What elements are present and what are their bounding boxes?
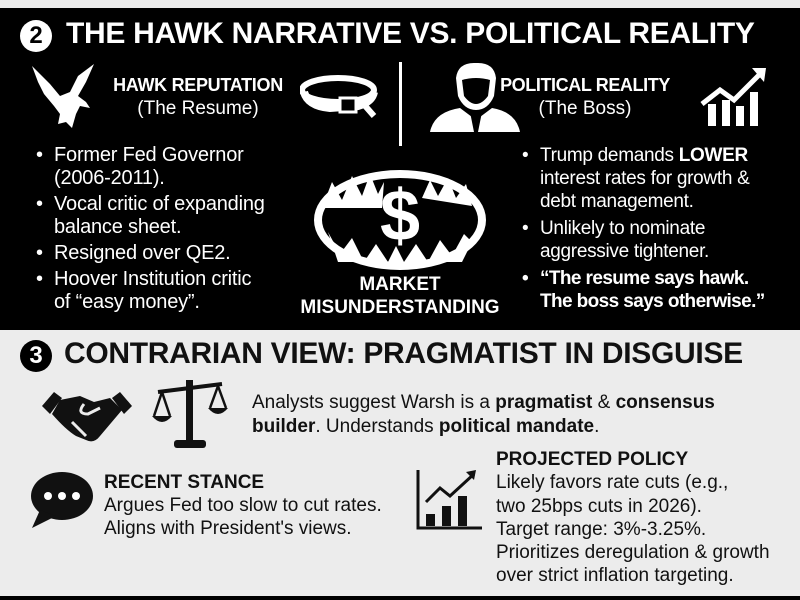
left bullets <box>36 144 265 313</box>
right bullets: interest rates for growth & <box>540 168 749 189</box>
heading: political reality: (The Boss) <box>539 98 631 119</box>
label: market misunderstanding: MISUNDERSTANDING <box>300 297 500 318</box>
block: projected policy: Target range: 3%-3.25%. <box>496 519 706 540</box>
right bullets: aggressive tightener. <box>540 241 709 262</box>
heading: hawk reputation: (The Resume) <box>137 98 259 119</box>
block: projected policy: PROJECTED POLICY <box>496 449 688 470</box>
section badge 2 <box>20 20 52 52</box>
left bullets: Hoover Institution critic <box>54 268 251 290</box>
icon: president silhouette <box>430 63 520 132</box>
icon: eagle <box>32 64 94 128</box>
left bullets: of “easy money”. <box>54 291 200 313</box>
bottom bar <box>0 596 800 600</box>
block: projected policy: Likely favors rate cuts (e.g., <box>496 472 728 493</box>
section badge 3: 3 <box>29 342 43 369</box>
icon: scales <box>152 380 228 448</box>
block: recent stance <box>104 472 382 539</box>
panel: hawk narrative <box>0 8 800 330</box>
heading: political reality: POLITICAL REALITY <box>500 75 670 95</box>
icon: rising chart <box>700 68 766 126</box>
right bullets: The boss says otherwise.” <box>540 291 765 312</box>
title bottom: CONTRARIAN VIEW: PRAGMATIST IN DISGUISE <box>64 337 743 370</box>
icon: speech bubble <box>31 472 93 528</box>
left bullets: Vocal critic of expanding balance sheet. <box>54 193 265 238</box>
block: projected policy: two 25bps cuts in 2026). <box>496 496 702 517</box>
left bullets: Former Fed Governor (2006-2011). <box>54 144 244 189</box>
right bullets <box>522 145 765 312</box>
left bullets: Resigned over QE2. <box>54 242 230 264</box>
text: analysts: Analysts suggest Warsh is a pragmatist & consensus builder. Understands political mandate. <box>252 392 715 437</box>
label: market misunderstanding: MARKET <box>359 274 441 295</box>
icon: bear trap with dollar: $ <box>380 176 420 256</box>
divider <box>399 62 402 146</box>
icon: bear trap with dollar <box>314 170 486 270</box>
icon: handshake <box>42 392 132 442</box>
right bullets: “The resume says hawk. <box>540 268 749 289</box>
right bullets: Unlikely to nominate <box>540 218 705 239</box>
right bullets: Trump demands LOWER <box>540 145 748 166</box>
block: recent stance: RECENT STANCE <box>104 472 264 493</box>
title top: THE HAWK NARRATIVE VS. POLITICAL REALITY <box>66 17 755 50</box>
block: projected policy: over strict inflation targeting. <box>496 565 734 586</box>
section badge 2: 2 <box>29 22 43 49</box>
block: recent stance: Argues Fed too slow to cut rates. Aligns with President's views. <box>104 495 382 539</box>
label: market misunderstanding <box>300 274 500 318</box>
heading: hawk reputation: HAWK REPUTATION <box>113 75 283 95</box>
heading: hawk reputation <box>113 75 283 119</box>
icon: belt <box>300 75 378 118</box>
section badge 3 <box>20 340 52 372</box>
right bullets: debt management. <box>540 191 694 212</box>
block: projected policy <box>496 449 770 586</box>
heading: political reality <box>500 75 670 119</box>
block: projected policy: Prioritizes deregulation & growth <box>496 542 770 563</box>
icon: growth chart <box>416 470 482 530</box>
